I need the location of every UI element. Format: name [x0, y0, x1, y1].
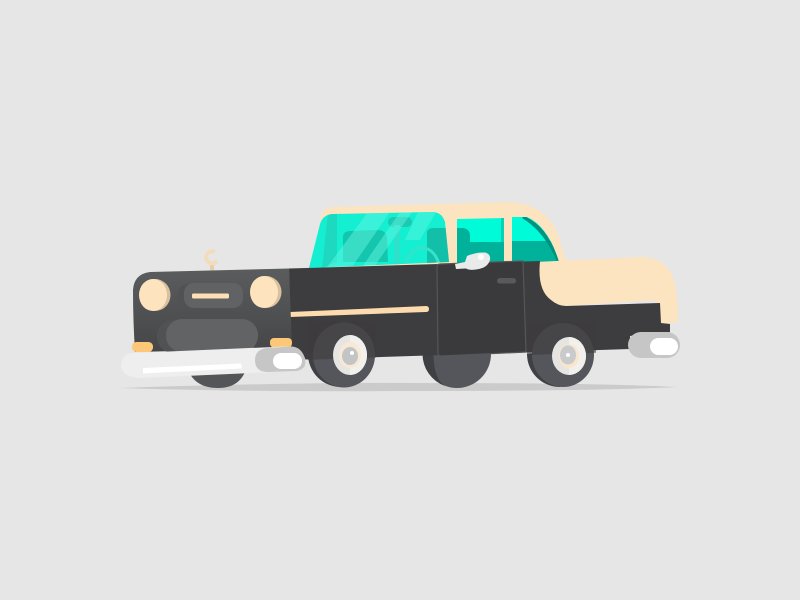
seat — [343, 230, 388, 262]
right headlight — [250, 276, 282, 308]
body stripe — [290, 306, 429, 317]
side window 2 — [512, 217, 559, 262]
right amber light — [270, 338, 292, 348]
bumper lamp — [255, 346, 305, 372]
glare stripes — [328, 212, 390, 267]
side mirror — [455, 252, 490, 270]
side window 1 — [457, 218, 504, 264]
front wheel — [190, 372, 245, 388]
lower grille — [157, 319, 258, 353]
left amber light — [132, 342, 153, 352]
upper grille — [178, 283, 243, 309]
front grille panel — [133, 268, 292, 352]
left headlight — [139, 279, 170, 311]
illustration: vintage car — [124, 202, 680, 392]
ground shadow — [119, 383, 677, 391]
door handle — [497, 278, 516, 284]
rear fender — [535, 257, 678, 324]
rear bumper lamp — [628, 332, 680, 358]
rim — [552, 337, 586, 375]
second seat — [427, 228, 449, 265]
rear-view mirror — [388, 217, 412, 227]
icon: wrench — [206, 251, 217, 272]
front bumper — [121, 346, 306, 378]
rim — [333, 335, 367, 375]
steering wheel — [404, 246, 440, 264]
car body — [289, 261, 670, 360]
front-side wheel — [308, 322, 376, 388]
middle wheel — [422, 320, 491, 388]
windshield pillar — [322, 212, 337, 268]
door — [437, 261, 526, 356]
rear wheel — [527, 322, 596, 387]
roof — [319, 202, 568, 275]
bumper highlight — [143, 364, 242, 374]
grille bar — [192, 294, 229, 298]
windshield — [309, 212, 449, 268]
